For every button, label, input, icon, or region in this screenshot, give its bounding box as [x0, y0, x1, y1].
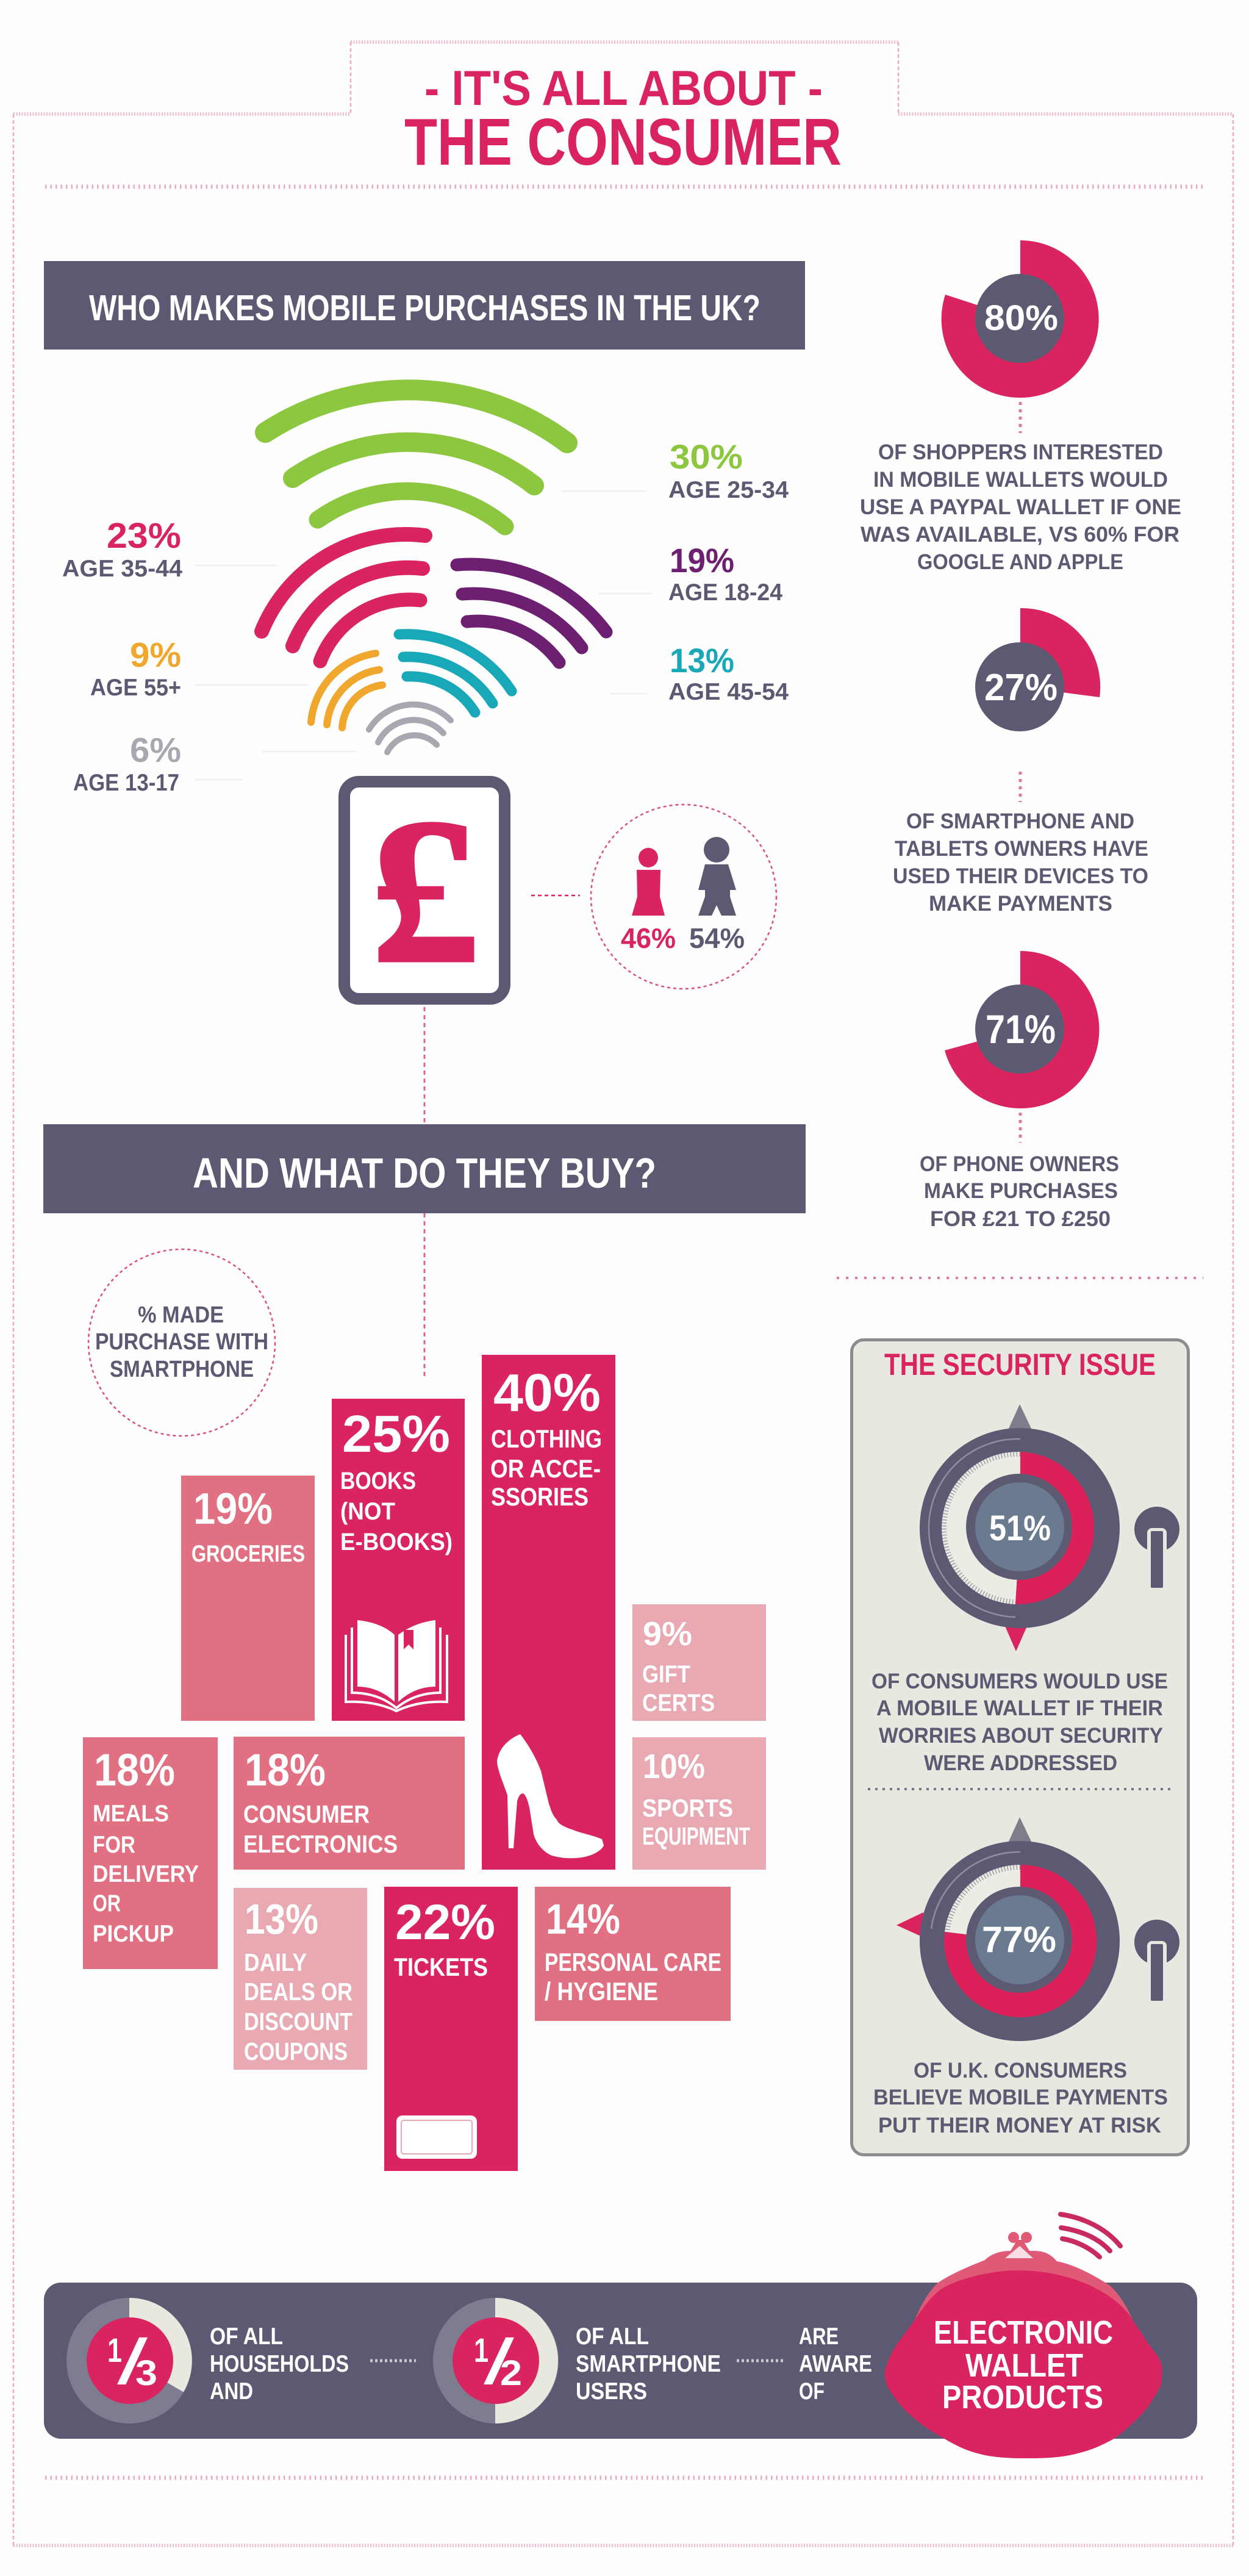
- text: 71% caption: OF PHONE OWNERS: [920, 1152, 1119, 1176]
- tile: tickets 22%: [384, 1887, 518, 2171]
- text: 51% caption: WORRIES ABOUT SECURITY: [879, 1724, 1163, 1748]
- label: 9% age 55+: [90, 636, 181, 701]
- arcs: age 35-44: [262, 534, 425, 661]
- tile: books 25%: (NOT: [340, 1498, 395, 1525]
- icon: handle: [1134, 1920, 1179, 2001]
- heading: who makes mobile purchases: [44, 261, 805, 350]
- icon: purse: [885, 2214, 1162, 2458]
- label: 19% age 18-24: [668, 541, 782, 606]
- tile: books 25%: [332, 1399, 465, 1721]
- text: 51% caption: WERE ADDRESSED: [924, 1751, 1117, 1775]
- callout: % made purchase with smartphone: % MADE: [138, 1302, 224, 1328]
- label: 19% age 18-24: 19%: [670, 541, 734, 579]
- arcs: age 13-17: [369, 705, 451, 752]
- text: 27% caption: TABLETS OWNERS HAVE: [895, 837, 1148, 861]
- text: of all smartphone users: OF ALL: [576, 2323, 649, 2350]
- label: 13% age 45-54: [668, 641, 789, 705]
- text: of all smartphone users: USERS: [576, 2378, 647, 2405]
- text: 51% caption: [871, 1670, 1168, 1775]
- panel: the security issue: [851, 1340, 1188, 2154]
- icon: phone with pound sign: [344, 776, 505, 1006]
- donut: one third: /: [117, 2327, 148, 2398]
- text: 80% caption: WAS AVAILABLE, VS 60% FOR: [861, 523, 1179, 547]
- tile: groceries 19%: GROCERIES: [191, 1541, 305, 1567]
- heading: what do they buy: AND WHAT DO THEY BUY?: [193, 1149, 656, 1197]
- text: of all smartphone users: [576, 2323, 721, 2405]
- text: of all households and: OF ALL: [210, 2323, 283, 2350]
- label: 6% age 13-17: AGE 13-17: [73, 770, 179, 796]
- tile: daily deals 13%: 13%: [245, 1895, 318, 1943]
- arcs: age 45-54: [399, 634, 512, 712]
- text: 51% caption: OF CONSUMERS WOULD USE: [871, 1670, 1168, 1693]
- icon: open book: [346, 1620, 447, 1711]
- text: 27% caption: [893, 809, 1148, 916]
- tile: sports equipment 10%: EQUIPMENT: [642, 1822, 750, 1850]
- stat: 71% donut: 71%: [986, 1006, 1056, 1052]
- tile: consumer electronics 18%: CONSUMER: [243, 1800, 370, 1828]
- donut: one half: [433, 2298, 559, 2424]
- stat: 71% donut: [945, 951, 1099, 1108]
- arcs: age 25-34: [265, 390, 567, 526]
- label: 9% age 55+: AGE 55+: [90, 675, 181, 701]
- tile: gift certs 9%: 9%: [643, 1615, 692, 1652]
- tile: clothing 40%: CLOTHING: [491, 1424, 602, 1453]
- tile: clothing 40%: [482, 1355, 615, 1870]
- tile: groceries 19%: 19%: [193, 1485, 273, 1534]
- text: are aware of: OF: [799, 2378, 825, 2405]
- text: 77% caption: PUT THEIR MONEY AT RISK: [878, 2114, 1161, 2137]
- text: 80% caption: OF SHOPPERS INTERESTED: [878, 440, 1163, 464]
- tile: meals 18%: [83, 1737, 218, 1969]
- donut: one half: 1: [474, 2331, 489, 2369]
- callout: % made purchase with smartphone: SMARTPHONE: [110, 1357, 254, 1382]
- icon: phone with pound sign: £: [371, 776, 479, 1006]
- tile: daily deals 13%: DISCOUNT: [244, 2007, 353, 2036]
- callout: gender split: [591, 805, 776, 989]
- label: 30% age 25-34: [668, 437, 789, 503]
- tile: meals 18%: 18%: [94, 1745, 175, 1795]
- gauge: 77%: [896, 1817, 1120, 2041]
- label: 19% age 18-24: AGE 18-24: [668, 579, 782, 606]
- tile: sports equipment 10%: [632, 1737, 766, 1870]
- tile: consumer electronics 18%: 18%: [245, 1745, 326, 1795]
- icon: man: [698, 837, 736, 916]
- tile: tickets 22%: 22%: [395, 1895, 495, 1950]
- tile: gift certs 9%: GIFT: [642, 1661, 690, 1688]
- text: 71% caption: [920, 1152, 1119, 1231]
- text: of all households and: HOUSEHOLDS: [210, 2351, 349, 2377]
- donut: one half: /: [484, 2327, 515, 2398]
- tile: sports equipment 10%: SPORTS: [642, 1794, 733, 1822]
- tile: personal care 14%: PERSONAL CARE: [545, 1948, 721, 1976]
- icon: woman: [632, 848, 665, 916]
- label: 23% age 35-44: [62, 516, 182, 582]
- text: 27% caption: MAKE PAYMENTS: [929, 892, 1112, 916]
- tile: books 25%: E-BOOKS): [340, 1529, 453, 1555]
- tile: gift certs 9%: [632, 1604, 766, 1721]
- tile: clothing 40%: 40%: [493, 1363, 601, 1423]
- text: are aware of: [799, 2323, 872, 2405]
- donut: one third: [66, 2298, 192, 2424]
- label: 23% age 35-44: AGE 35-44: [62, 556, 182, 582]
- tile: clothing 40%: SSORIES: [491, 1482, 589, 1511]
- donut: one third: 1: [107, 2331, 122, 2369]
- tile: meals 18%: PICKUP: [93, 1921, 174, 1947]
- tile: meals 18%: OR: [93, 1890, 121, 1917]
- arcs: age 18-24: [457, 564, 606, 662]
- title: - IT'S ALL ABOUT -: [424, 61, 823, 116]
- text: of all smartphone users: SMARTPHONE: [576, 2351, 721, 2377]
- gauge: 51%: 51%: [989, 1509, 1051, 1548]
- callout: gender split: 46%: [621, 922, 676, 954]
- tile: clothing 40%: OR ACCE-: [490, 1454, 601, 1483]
- stat: 80% donut: [942, 240, 1099, 398]
- tile: meals 18%: FOR: [93, 1832, 135, 1858]
- icon: handle: [1134, 1507, 1179, 1588]
- heading: what do they buy: [43, 1124, 806, 1213]
- text: electronic wallet products: ELECTRONIC: [934, 2314, 1113, 2351]
- text: 71% caption: FOR £21 TO £250: [930, 1207, 1111, 1231]
- tile: sports equipment 10%: 10%: [643, 1747, 705, 1786]
- text: 51% caption: A MOBILE WALLET IF THEIR: [876, 1696, 1163, 1720]
- label: 30% age 25-34: 30%: [670, 437, 743, 476]
- label: 6% age 13-17: 6%: [130, 731, 181, 770]
- text: 27% caption: USED THEIR DEVICES TO: [893, 864, 1148, 888]
- text: 77% caption: BELIEVE MOBILE PAYMENTS: [873, 2086, 1168, 2109]
- gauge: 77%: 77%: [982, 1919, 1056, 1960]
- text: of all households and: AND: [210, 2378, 253, 2405]
- text: are aware of: ARE: [799, 2323, 839, 2350]
- tile: meals 18%: MEALS: [93, 1801, 169, 1827]
- icon: ticket: [396, 2115, 477, 2159]
- text: 80% caption: GOOGLE AND APPLE: [917, 550, 1123, 574]
- stat: 27% donut: 27%: [984, 667, 1058, 709]
- label: 6% age 13-17: [73, 731, 181, 796]
- text: electronic wallet products: [934, 2314, 1113, 2416]
- label: 30% age 25-34: AGE 25-34: [668, 477, 789, 503]
- tile: meals 18%: DELIVERY: [93, 1861, 199, 1887]
- donut: one half: 2: [500, 2353, 522, 2393]
- tile: gift certs 9%: CERTS: [642, 1690, 715, 1717]
- text: 80% caption: IN MOBILE WALLETS WOULD: [873, 468, 1168, 492]
- tile: consumer electronics 18%: [234, 1737, 465, 1870]
- icon: high heel shoe: [497, 1734, 604, 1858]
- text: electronic wallet products: PRODUCTS: [942, 2379, 1103, 2416]
- callout: % made purchase with smartphone: PURCHASE WITH: [95, 1329, 268, 1355]
- title: THE CONSUMER: [404, 105, 842, 179]
- tile: daily deals 13%: COUPONS: [244, 2037, 348, 2065]
- tile: daily deals 13%: DAILY: [244, 1948, 307, 1976]
- label: 9% age 55+: 9%: [130, 636, 181, 675]
- text: 80% caption: [860, 440, 1181, 574]
- chart: wifi age breakdown: [262, 390, 606, 752]
- tile: personal care 14%: 14%: [546, 1895, 620, 1943]
- heading: who makes mobile purchases: WHO MAKES MOBILE PURCHASES IN THE UK?: [89, 288, 760, 328]
- callout: % made purchase with smartphone: [88, 1249, 275, 1436]
- title: [404, 61, 842, 179]
- label: 13% age 45-54: AGE 45-54: [668, 679, 789, 705]
- text: 71% caption: MAKE PURCHASES: [924, 1179, 1118, 1203]
- tile: personal care 14%: [535, 1887, 731, 2021]
- stat: 27% donut: [975, 608, 1100, 731]
- text: 77% caption: OF U.K. CONSUMERS: [914, 2059, 1127, 2083]
- tile: personal care 14%: / HYGIENE: [545, 1977, 658, 2006]
- donut: one third: 3: [135, 2353, 157, 2393]
- stat: 80% donut: 80%: [984, 298, 1058, 338]
- label: 13% age 45-54: 13%: [670, 641, 734, 680]
- arcs: age 55+: [311, 653, 382, 728]
- callout: gender split: 54%: [689, 922, 745, 954]
- text: 77% caption: [873, 2059, 1168, 2137]
- text: electronic wallet products: WALLET: [965, 2347, 1083, 2384]
- tile: books 25%: BOOKS: [340, 1468, 416, 1494]
- tile: tickets 22%: TICKETS: [394, 1953, 488, 1981]
- panel: electronic wallet awareness bar: [44, 2283, 1197, 2439]
- heading: security issue: THE SECURITY ISSUE: [884, 1347, 1156, 1382]
- tile: books 25%: 25%: [342, 1405, 450, 1463]
- text: 80% caption: USE A PAYPAL WALLET IF ONE: [860, 495, 1181, 519]
- text: of all households and: [210, 2323, 349, 2405]
- gauge: 51%: [920, 1404, 1120, 1651]
- text: are aware of: AWARE: [799, 2351, 872, 2377]
- label: 23% age 35-44: 23%: [107, 516, 181, 556]
- tile: consumer electronics 18%: ELECTRONICS: [243, 1830, 398, 1858]
- tile: daily deals 13%: DEALS OR: [244, 1978, 353, 2006]
- tile: daily deals 13%: [234, 1888, 367, 2070]
- tile: groceries 19%: [181, 1476, 315, 1721]
- text: 27% caption: OF SMARTPHONE AND: [906, 809, 1134, 833]
